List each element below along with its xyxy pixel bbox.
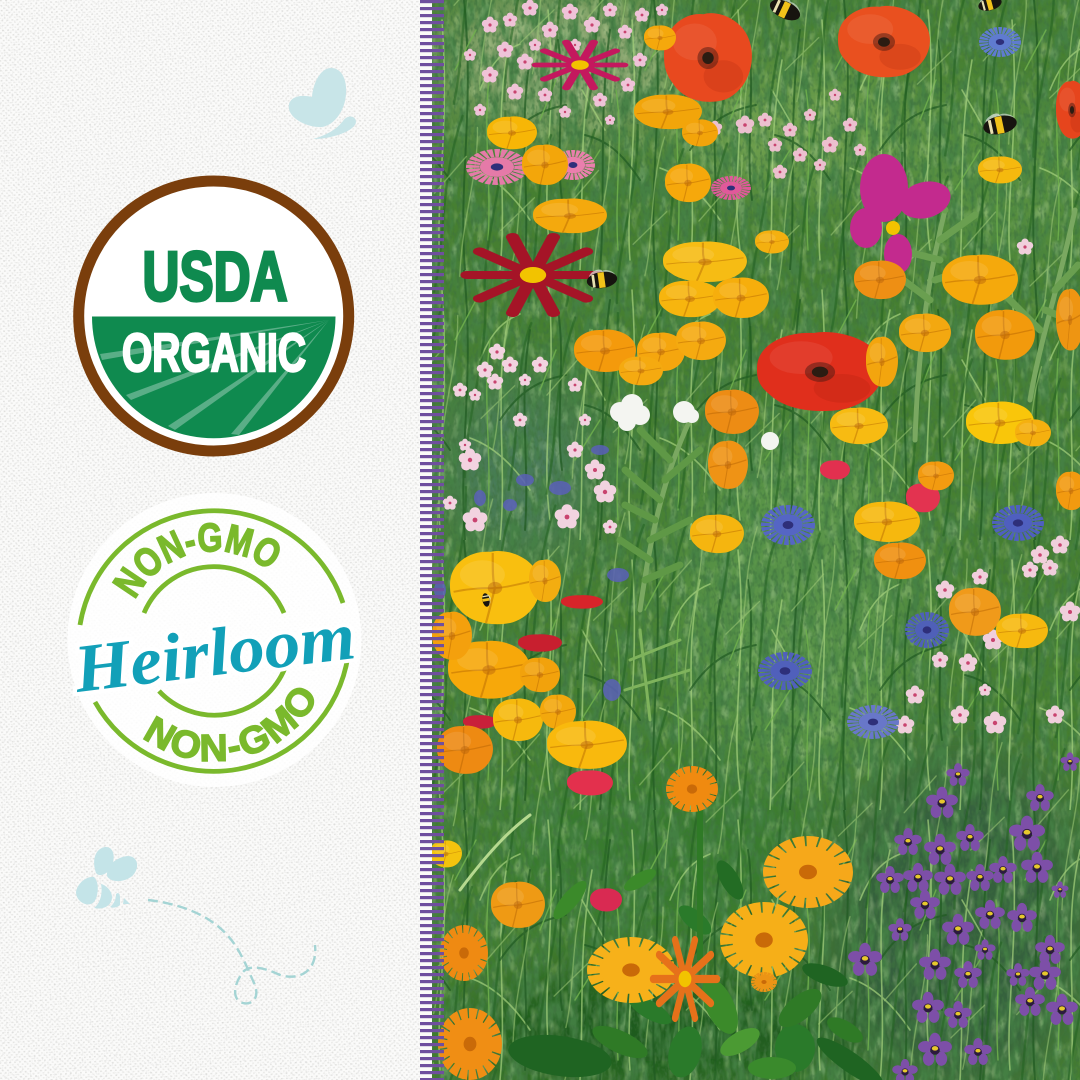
flowers: purple schizanthus [848, 752, 1080, 1080]
outer and inner rings [80, 511, 348, 771]
top left pink cluster [464, 0, 668, 125]
USDA label: USDA [142, 238, 288, 316]
meadow base [432, 0, 1080, 1080]
badge: Non-GMO Heirloom: NON-GMO [112, 522, 280, 599]
top NON-GMO arc text [135, 551, 274, 600]
flowers: blue-violet speckles [434, 445, 629, 701]
bottom NON-GMO arc text [142, 693, 320, 761]
stems: thistle stalks and foliage [460, 190, 1078, 890]
right side pink cluster [896, 239, 1080, 734]
field rays [100, 320, 329, 435]
flower: magenta cosmos [850, 154, 955, 274]
ORGANIC label: ORGANIC [122, 323, 306, 383]
icon: butterfly [289, 68, 356, 139]
foliage: bottom leaves [506, 810, 889, 1080]
flowers: red poppies [664, 6, 1080, 411]
flowers: yellow and orange California poppies [430, 25, 1080, 928]
icon: bee with dashed flight path [76, 847, 315, 1003]
panel: wildflower meadow photo [430, 0, 1080, 1080]
green field [92, 316, 336, 438]
Heirloom script: Heirloom [69, 597, 359, 707]
badge: USDA Organic [79, 181, 349, 451]
badge: Non-GMO Heirloom: NON-GMO [142, 688, 314, 762]
flowers: small pink and white blossoms [443, 0, 1080, 734]
bees [481, 0, 1018, 607]
panel: linen background [0, 0, 432, 1080]
flight path [148, 900, 315, 1003]
bee [76, 847, 137, 909]
mid left pink and white cluster [443, 344, 617, 534]
flowers: red small blooms [463, 460, 940, 911]
flowers: star-shaped magenta and crimson [467, 42, 624, 313]
upper centre pink cluster [708, 89, 866, 179]
stitched purple zipper edge [420, 0, 444, 1080]
badge: Non-GMO Heirloom [68, 493, 362, 787]
flowers: pink cornflowers [473, 153, 747, 197]
flowers: white blossoms [610, 394, 779, 450]
flowers: orange calendula [443, 770, 846, 1074]
flowers: blue cornflowers [764, 30, 1038, 735]
